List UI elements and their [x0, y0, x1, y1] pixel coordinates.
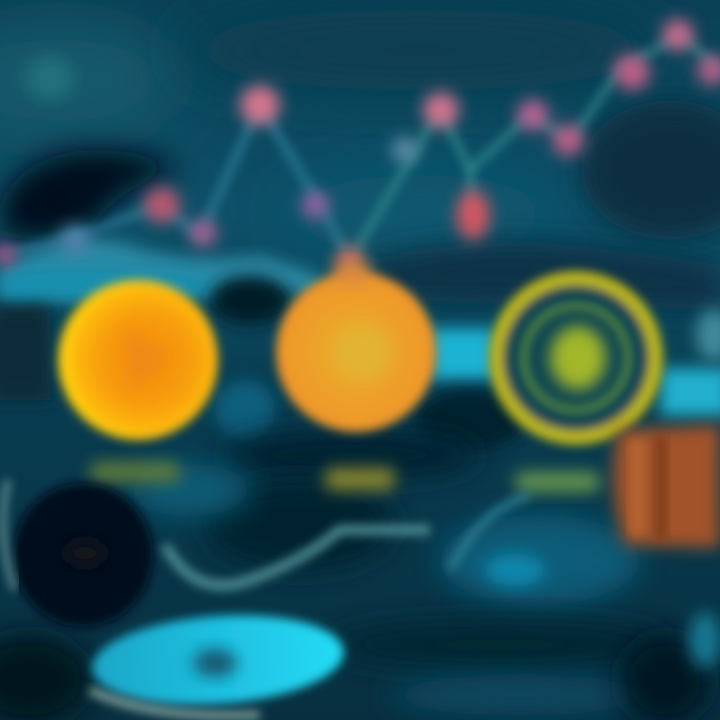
- chart markers: [0, 19, 720, 274]
- coin reflections: [90, 462, 600, 492]
- secondary wavy line: [450, 495, 530, 570]
- dark landscape shapes: [0, 150, 720, 720]
- dark coin: [3, 480, 153, 627]
- wavy line: [165, 530, 430, 585]
- coin: amber: [276, 262, 436, 432]
- faint moon glow: [26, 56, 74, 100]
- glowing cyan disc: [89, 607, 347, 716]
- coin: yellow-green ring: [496, 278, 656, 438]
- coin: solid yellow-orange: [58, 280, 218, 440]
- copper stack: [613, 425, 720, 548]
- line chart: [0, 35, 720, 260]
